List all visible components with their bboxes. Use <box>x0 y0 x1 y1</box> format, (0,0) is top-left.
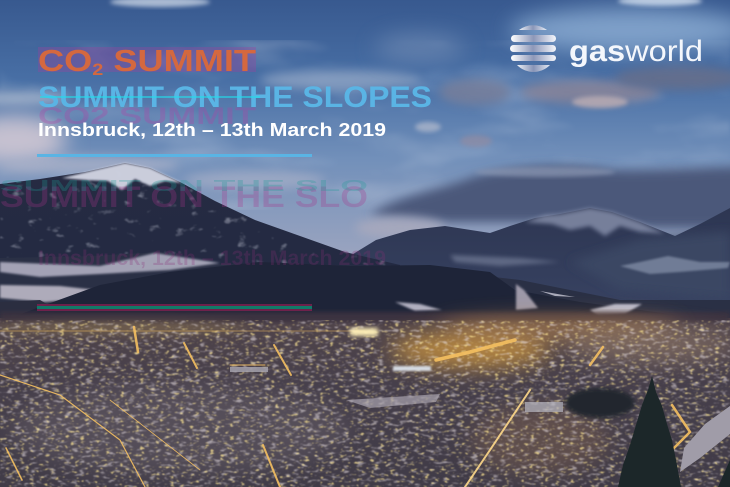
ghost divider <box>37 304 312 311</box>
divider line <box>37 154 312 157</box>
dark wooded hills <box>0 262 730 322</box>
heading: CO2 Summit: SUMMIT <box>103 43 256 78</box>
fir tree <box>618 376 730 487</box>
heading: Summit on the Slopes: SUMMIT ON THE SLOPES <box>38 81 432 114</box>
glitch ghost text <box>0 103 386 311</box>
ghost slogan over mountain: SUMMIT ON THE SLO <box>0 181 368 214</box>
heading: CO2 Summit <box>38 43 256 79</box>
dark tree stand <box>565 388 635 418</box>
gasworld logo <box>510 25 703 72</box>
heading: CO2 Summit: 2 <box>92 60 103 79</box>
city lights <box>0 312 730 487</box>
river <box>680 406 730 472</box>
sky <box>0 0 730 265</box>
window lights texture <box>0 320 730 487</box>
heading: CO2 Summit: CO <box>38 43 84 78</box>
event date and place: Innsbruck, 12th – 13th March 2019 <box>38 119 386 140</box>
ghost title behind date: CO2 SUMMIT <box>38 103 256 130</box>
right mountains <box>340 208 730 330</box>
logo wordmark: gasworld <box>569 35 703 68</box>
warm glow areas <box>390 332 550 368</box>
bright stadium and buildings <box>350 328 378 336</box>
snowy foothills <box>0 252 730 325</box>
ghost slogan teal offset: SUMMIT ON THE SLO <box>0 178 368 195</box>
ghost date in foothills: Innsbruck, 12th – 13th March 2019 <box>38 247 386 270</box>
snowy rooftops texture <box>0 320 730 487</box>
clouds <box>0 0 730 239</box>
lit streets <box>0 327 690 487</box>
left snow-capped mountain <box>0 160 400 275</box>
icon: striped globe <box>510 25 556 72</box>
